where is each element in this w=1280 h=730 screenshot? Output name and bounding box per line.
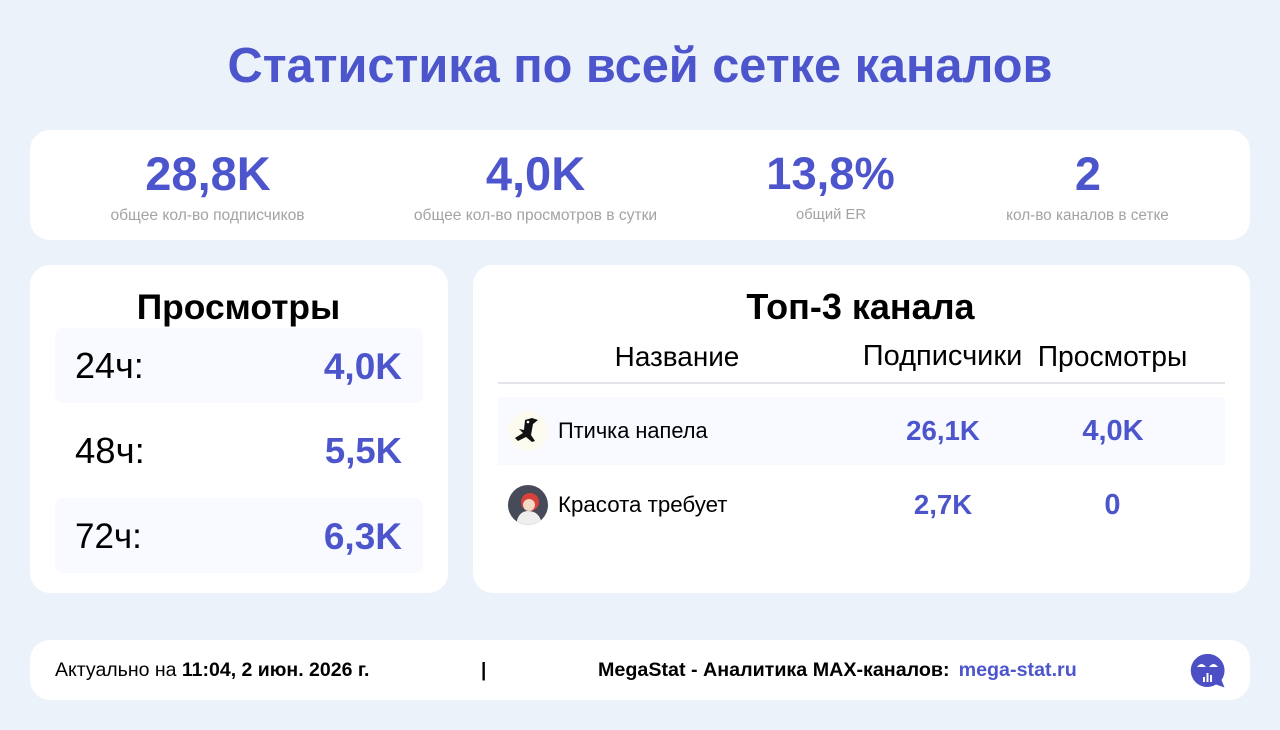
row: channel 1: 26,1K <box>906 415 980 446</box>
icon: portrait avatar <box>508 485 548 525</box>
stat: ER: общий ER <box>796 207 866 223</box>
icon: bird avatar <box>508 411 548 451</box>
footer date: Актуально на 11:04, 2 июн. 2026 г. <box>55 659 369 681</box>
table header: Просмотры <box>1038 340 1187 372</box>
panel: summary stats <box>30 130 1250 240</box>
stat: channel count <box>1006 147 1169 224</box>
stat: daily views: 4,0K <box>486 147 585 200</box>
heading: views: Просмотры <box>137 287 340 327</box>
row: channel 1 <box>498 397 1225 465</box>
stat: daily views: общее кол-во просмотров в сутки <box>414 207 657 224</box>
row: 48h: 5,5K <box>325 430 402 471</box>
row: channel 2: 0 <box>1104 489 1121 521</box>
footer promo: MegaStat - Аналитика MAX-каналов: mega-stat.ru <box>598 659 1077 681</box>
table header: Подписчики <box>863 340 1022 372</box>
icon: logo <box>1190 654 1224 688</box>
row: 24h <box>55 328 423 403</box>
row: 48h <box>75 430 402 471</box>
row: channel 2: 2,7K <box>914 489 972 520</box>
panel: views <box>30 265 448 593</box>
stat: subscribers <box>110 147 305 224</box>
title: Статистика по всей сетке каналов <box>228 39 1052 93</box>
stat: subscribers: 28,8K <box>145 147 271 200</box>
stat: ER: 13,8% <box>766 148 895 199</box>
panel: footer <box>30 640 1250 700</box>
row: channel 2 <box>508 485 1121 525</box>
row: 24h: 4,0K <box>324 346 402 387</box>
row: 48h: 48ч: <box>75 430 145 471</box>
stat: channel count: 2 <box>1075 147 1101 200</box>
stat: daily views <box>414 147 657 224</box>
stat: ER <box>766 148 895 223</box>
table header: Название <box>615 341 739 372</box>
stat: channel count: кол-во каналов в сетке <box>1006 207 1169 224</box>
footer separator: | <box>481 660 486 681</box>
row: 24h: 24ч: <box>75 345 144 386</box>
row: 72h: 72ч: <box>75 516 142 556</box>
row: channel 1: 4,0K <box>1082 415 1144 447</box>
row: channel 2: Красота требует <box>558 492 727 517</box>
table header <box>498 340 1225 384</box>
heading: top 3: Топ-3 канала <box>746 286 975 327</box>
panel: top channels <box>473 265 1250 593</box>
stat: subscribers: общее кол-во подписчиков <box>110 207 305 224</box>
row: 72h <box>55 498 423 573</box>
row: channel 1: Птичка напела <box>558 418 708 443</box>
row: 72h: 6,3K <box>324 516 402 557</box>
